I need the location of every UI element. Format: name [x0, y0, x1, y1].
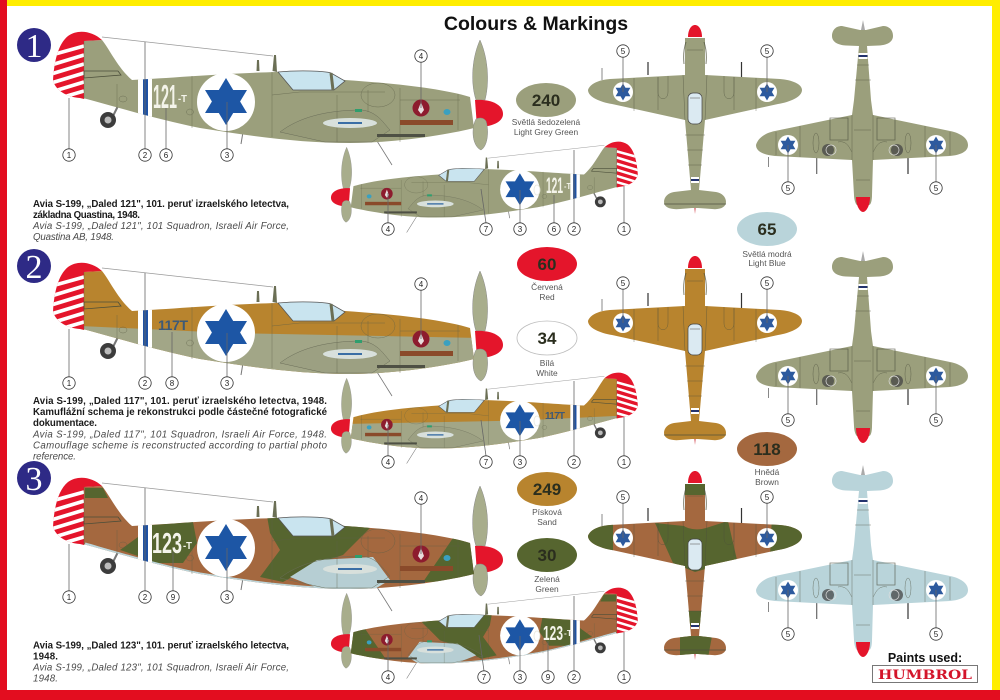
scheme number badge 3 [17, 461, 51, 498]
paint chip 240 [512, 83, 581, 137]
callouts scheme 1: 2 [143, 151, 148, 160]
callouts scheme 1: 3 [225, 151, 230, 160]
paint chip 60: 60 [538, 255, 556, 274]
aircraft 1 top view [588, 25, 802, 214]
caption scheme 1: základna Quastina, 1948. [33, 210, 140, 221]
callouts scheme 1: 6 [164, 151, 169, 160]
callouts scheme 1: 3 [518, 225, 523, 234]
callouts scheme 2: 7 [484, 458, 489, 467]
callouts scheme 1: 4 [419, 52, 424, 61]
callouts scheme 2: 1 [67, 379, 72, 388]
callouts scheme 2: 5 [621, 279, 626, 288]
caption scheme 1: Avia S-199, „Daled 121", 101 Squadron, Israeli Air Force, [32, 221, 289, 232]
paint chip 118: Hnědá [755, 467, 780, 477]
callouts scheme 1: 5 [621, 47, 626, 56]
callouts scheme 3: 5 [786, 630, 791, 639]
paint chip 60 [517, 247, 577, 302]
callouts scheme 3: 5 [765, 493, 770, 502]
callouts scheme 3: 1 [622, 673, 627, 682]
scheme number badge 2: 2 [26, 249, 42, 286]
caption scheme 2: Avia S-199, „Daled 117", 101 Squadron, Israeli Air Force, 1948. [32, 430, 327, 440]
paint chip 240: Light Grey Green [514, 127, 578, 137]
callouts scheme 3: 9 [171, 593, 176, 602]
caption scheme 2 [32, 396, 328, 462]
aircraft 3 bottom view [756, 465, 968, 657]
paint chip 65: Světlá modrá [742, 249, 792, 259]
aircraft 3 right side view: 123 [543, 623, 563, 645]
callouts scheme 3: 2 [572, 673, 577, 682]
callouts scheme 2: 4 [419, 280, 424, 289]
callouts scheme 1: 1 [67, 151, 72, 160]
caption scheme 3: 1948. [33, 652, 58, 662]
callouts scheme 3: 9 [546, 673, 551, 682]
callouts scheme 2: 2 [143, 379, 148, 388]
paint chip 249: 249 [533, 480, 561, 499]
aircraft 1 left side view: 121 [153, 78, 177, 115]
aircraft 3 top view [588, 471, 802, 660]
caption scheme 2: Camouflage scheme is reconstructed according to partial photo [33, 440, 328, 452]
aircraft 1 right side view: -T [564, 182, 571, 191]
caption scheme 1 [32, 199, 289, 243]
paint chip 60: Červená [531, 282, 563, 292]
aircraft 2 right side view: 117T [545, 411, 565, 422]
paint chip 34: 34 [538, 329, 557, 348]
paint chip 65: Light Blue [748, 258, 786, 268]
caption scheme 3: Avia S-199, „Daled 123", 101. peruť izraelského letectva, [33, 640, 289, 652]
callouts scheme 2: 1 [622, 458, 627, 467]
scheme number badge 3: 3 [26, 461, 42, 498]
caption scheme 2: Avia S-199, „Daled 117", 101. peruť izraelského letectva, 1948. [33, 396, 327, 407]
callouts scheme 3: 4 [419, 494, 424, 503]
caption scheme 2: Kamuflážní schema je rekonstrukci podle částečné fotografické [33, 407, 328, 418]
callouts scheme 1: 7 [484, 225, 489, 234]
aircraft 3 left side view: 123 [152, 528, 182, 560]
scheme number badge 2 [17, 249, 51, 286]
callouts scheme 1: 5 [765, 47, 770, 56]
caption scheme 1: Quastina AB, 1948. [33, 232, 114, 243]
callouts scheme 2: 8 [170, 379, 175, 388]
callouts scheme 2: 3 [225, 379, 230, 388]
paint chip 60: Red [539, 292, 555, 302]
aircraft 3 right side view [331, 588, 641, 679]
caption scheme 3: 1948. [33, 674, 58, 684]
aircraft 3 left side view: -T [183, 541, 192, 552]
paints used label and Humbrol logo: Paints used: [888, 651, 962, 665]
aircraft 3 right side view: -T [564, 629, 572, 638]
aircraft 1 left side view [48, 32, 503, 165]
caption scheme 1: Avia S-199, „Daled 121", 101. peruť izraelského letectva, [33, 199, 289, 210]
callouts scheme 2: 5 [786, 416, 791, 425]
title: Colours & Markings [444, 13, 628, 35]
paint chip 34: Bílá [540, 358, 555, 368]
paint chip 240: Světlá šedozelená [512, 117, 581, 127]
paint chip 34 [517, 321, 577, 378]
aircraft 2 bottom view [756, 251, 968, 443]
caption scheme 3 [32, 640, 289, 684]
callouts scheme 2: 4 [386, 458, 391, 467]
callouts scheme 1: 1 [622, 225, 627, 234]
callouts scheme 3: 1 [67, 593, 72, 602]
aircraft 1 left side view: -T [178, 94, 187, 105]
caption scheme 2: dokumentace. [33, 418, 97, 429]
aircraft 1 right side view: 121 [546, 173, 563, 198]
callouts scheme 2: 2 [572, 458, 577, 467]
callouts scheme 2 [63, 273, 942, 468]
callouts scheme 3: 5 [934, 630, 939, 639]
callouts scheme 2: 3 [518, 458, 523, 467]
paint chip 65: 65 [758, 220, 776, 239]
paint chip 30 [517, 538, 577, 594]
callouts scheme 1 [63, 42, 942, 235]
paint chip 240: 240 [532, 91, 560, 110]
callouts scheme 1: 2 [572, 225, 577, 234]
callouts scheme 3: 5 [621, 493, 626, 502]
paint chip 30: 30 [538, 546, 556, 565]
caption scheme 3: Avia S-199, „Daled 123", 101 Squadron, Israeli Air Force, [32, 662, 289, 674]
callouts scheme 1: 4 [386, 225, 391, 234]
callouts scheme 1: 6 [552, 225, 557, 234]
scheme number badge 1 [17, 28, 51, 65]
callouts scheme 3: 7 [482, 673, 487, 682]
scheme number badge 1: 1 [26, 28, 42, 65]
callouts scheme 1: 5 [786, 184, 791, 193]
callouts scheme 2: 5 [934, 416, 939, 425]
paint chip 249: Písková [532, 507, 562, 517]
callouts scheme 1: 5 [934, 184, 939, 193]
callouts scheme 3: 4 [386, 673, 391, 682]
caption scheme 2: reference. [33, 452, 76, 462]
aircraft 2 left side view: 117T [158, 317, 188, 333]
paint chip 249: Sand [537, 517, 557, 527]
paint chip 118: Brown [755, 477, 779, 487]
paint chip 30: Green [535, 584, 559, 594]
callouts scheme 3: 3 [518, 673, 523, 682]
paint chip 118 [737, 432, 797, 487]
aircraft 3 left side view [48, 478, 503, 611]
aircraft 2 left side view [48, 263, 503, 396]
aircraft 2 right side view [331, 373, 641, 464]
aircraft 2 top view [588, 256, 802, 444]
callouts scheme 3 [63, 488, 942, 683]
callouts scheme 3: 3 [225, 593, 230, 602]
paint chip 249 [517, 472, 577, 527]
aircraft 1 bottom view [756, 20, 968, 212]
aircraft 1 right side view [331, 142, 641, 233]
callouts scheme 3: 2 [143, 593, 148, 602]
paint chip 118: 118 [753, 440, 781, 459]
paints used label and Humbrol logo [872, 651, 978, 683]
paint chip 34: White [536, 368, 558, 378]
paint chip 65 [737, 212, 797, 268]
paints used label and Humbrol logo: HUMBROL [878, 668, 972, 683]
callouts scheme 2: 5 [765, 279, 770, 288]
paint chip 30: Zelená [534, 574, 560, 584]
